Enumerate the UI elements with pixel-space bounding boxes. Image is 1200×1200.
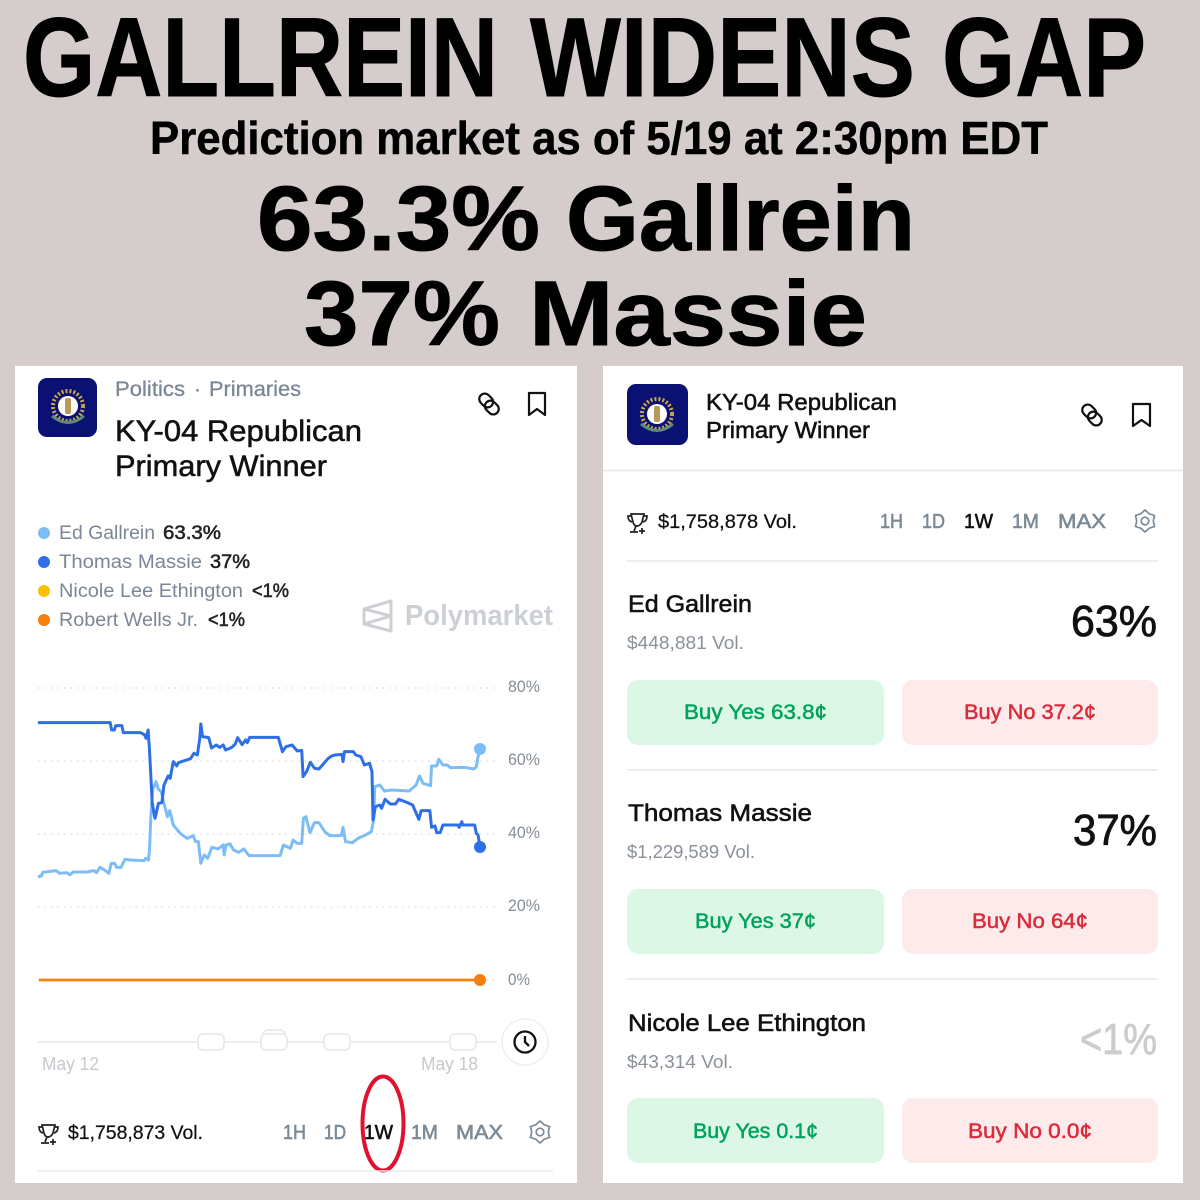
button: buy yes: Buy Yes 63.8¢ [684, 701, 827, 724]
button: buy no [902, 889, 1158, 954]
series: Ed Gallrein [38, 749, 480, 877]
volume: $1,758,873 Vol. [68, 1123, 203, 1144]
legend: 37% [210, 552, 250, 573]
callout: red circle around 1W [362, 1076, 404, 1170]
outcome: Thomas Massie: $1,229,589 Vol. [627, 842, 755, 862]
headline: Massie odds: Massie [529, 263, 867, 365]
market heading: KY-04 Republican [115, 415, 362, 448]
headline: Massie odds: 37% [304, 263, 500, 365]
button: buy no: Buy No 37.2¢ [964, 701, 1096, 724]
button: buy no [902, 1098, 1158, 1163]
outcome: Thomas Massie [627, 800, 1158, 954]
button: buy yes: Buy Yes 37¢ [695, 910, 816, 933]
icon: trophy [628, 514, 647, 534]
outcome: Nicole Lee Ethington [627, 1010, 1158, 1163]
legend: <1% [208, 610, 245, 631]
volume: $1,758,878 Vol. [658, 512, 797, 533]
headline: Gallrein odds [257, 168, 915, 270]
icon: Kentucky flag [627, 384, 688, 445]
market heading [706, 389, 897, 443]
y axis labels: 80% [508, 677, 540, 696]
headline: Massie odds [304, 263, 867, 365]
outcome: Thomas Massie: 37% [1073, 806, 1157, 855]
time slider: May 18 [421, 1054, 478, 1074]
icon: trophy [39, 1125, 58, 1145]
button: buy no [902, 680, 1158, 745]
legend: Thomas Massie [59, 552, 202, 573]
end marker: Massie [474, 841, 486, 853]
time slider [38, 1030, 497, 1074]
legend: <1% [252, 581, 289, 602]
icon: bookmark [529, 393, 545, 415]
icon: Kentucky flag [38, 378, 97, 437]
legend: Nicole Lee Ethington [59, 581, 243, 602]
legend: 63.3% [163, 523, 221, 544]
category label: · [194, 378, 201, 401]
time range tabs: 1W [364, 1122, 393, 1144]
outcome: Nicole Lee Ethington: $43,314 Vol. [627, 1052, 733, 1072]
outcome: Ed Gallrein: 63% [1071, 597, 1157, 646]
end marker: Gallrein [474, 743, 486, 755]
time range tabs: 1D [922, 511, 945, 533]
time range tabs: 1M [1012, 511, 1039, 533]
time range tabs: 1D [324, 1122, 346, 1144]
market heading: Primary Winner [706, 417, 870, 443]
market heading: KY-04 Republican [706, 389, 897, 415]
market heading: Primary Winner [115, 450, 327, 483]
icon: link [476, 391, 502, 417]
title [23, 0, 1146, 120]
panel: outcomes card [603, 366, 1183, 1183]
button: buy yes [627, 1098, 884, 1163]
y axis labels: 20% [508, 896, 540, 915]
y axis labels [508, 677, 540, 989]
time range tabs: 1W [964, 511, 993, 533]
category label [115, 378, 301, 401]
panel: price chart card [15, 366, 577, 1183]
button: buy yes: Buy Yes 0.1¢ [693, 1120, 818, 1143]
time range tabs: 1H [283, 1122, 306, 1144]
line chart [38, 677, 540, 989]
time range tabs [880, 511, 1106, 533]
Polymarket watermark: Polymarket [405, 600, 553, 632]
outcome: Nicole Lee Ethington: Nicole Lee Ethington [628, 1010, 866, 1037]
outcome: Thomas Massie: Thomas Massie [628, 800, 812, 827]
time range tabs: MAX [1058, 511, 1106, 533]
legend: Robert Wells Jr. [59, 610, 198, 631]
icon: bookmark [1133, 404, 1150, 426]
button: buy yes [627, 889, 884, 954]
time range tabs: MAX [456, 1122, 503, 1144]
icon: link [1079, 402, 1105, 428]
legend: Ed Gallrein [59, 523, 155, 544]
time slider: May 12 [42, 1054, 99, 1074]
outcome: Ed Gallrein: $448,881 Vol. [627, 633, 744, 653]
button: buy no: Buy No 0.0¢ [968, 1120, 1092, 1143]
series: Thomas Massie [38, 723, 480, 847]
time range tabs: 1M [411, 1122, 438, 1144]
icon: settings gear [1136, 510, 1154, 532]
legend [38, 523, 289, 631]
time range tabs: 1H [880, 511, 903, 533]
icon: settings gear [530, 1121, 550, 1143]
headline: Gallrein odds: Gallrein [566, 168, 915, 270]
outcome: Ed Gallrein: Ed Gallrein [628, 591, 752, 618]
y axis labels: 60% [508, 750, 540, 769]
icon: clock button [502, 1019, 548, 1065]
button: buy no: Buy No 64¢ [972, 910, 1088, 933]
subtitle: Prediction market as of 5/19 at 2:30pm EDT [150, 112, 1048, 164]
outcome: Ed Gallrein [627, 591, 1158, 745]
category label: Primaries [209, 378, 301, 401]
market heading [115, 415, 362, 483]
y axis labels: 40% [508, 823, 540, 842]
outcome: Nicole Lee Ethington: <1% [1080, 1015, 1157, 1064]
button: buy yes [627, 680, 884, 745]
category label: Politics [115, 378, 185, 401]
end marker: low candidates [474, 974, 486, 986]
time range tabs [283, 1122, 503, 1144]
series: low candidates [39, 979, 480, 981]
headline: Gallrein odds: 63.3% [257, 168, 540, 270]
y axis labels: 0% [508, 970, 530, 989]
